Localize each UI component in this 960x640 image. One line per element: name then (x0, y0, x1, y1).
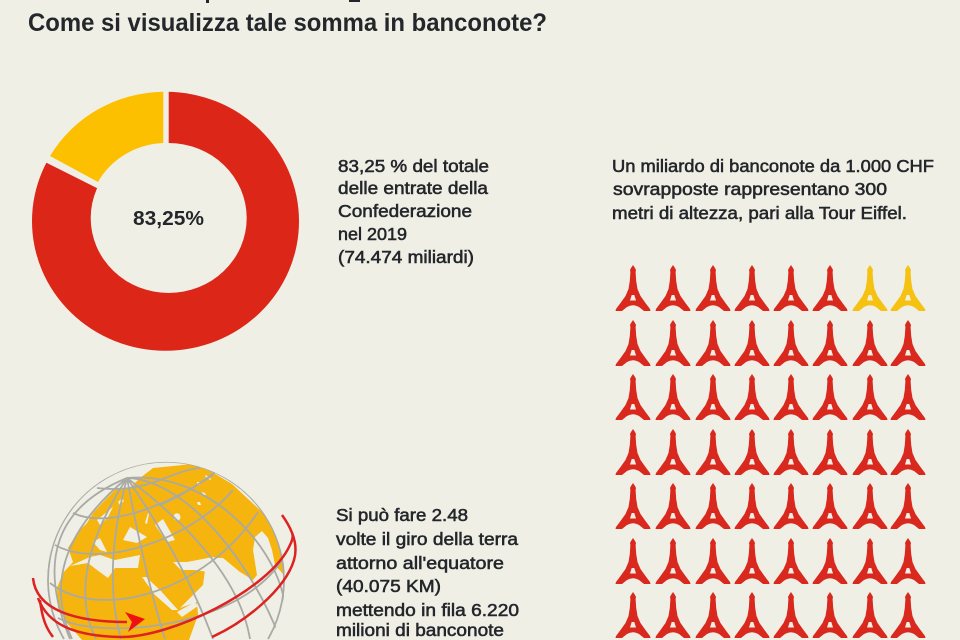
text block: share of revenue: Confederazione (338, 201, 472, 221)
donut chart (25, 85, 299, 351)
text block: trips around the equator: attorno all'equatore (336, 553, 504, 573)
text block: trips around the equator: volte il giro della terra (336, 529, 518, 549)
text block: Eiffel Tower comparison (612, 156, 934, 223)
equator arrow lines (33, 515, 296, 637)
text block: share of revenue: 83,25 % del totale (338, 156, 489, 176)
pictogram: grid of Eiffel towers (616, 265, 926, 638)
text block: trips around the equator: milioni di banconote (336, 620, 504, 640)
globe with equator arrows (33, 462, 296, 640)
text block: Eiffel Tower comparison: Un miliardo di banconote da 1.000 CHF (612, 156, 934, 176)
donut segment: yellow share (50, 92, 163, 182)
text block: trips around the equator (336, 505, 519, 640)
text block: share of revenue: delle entrate della (338, 178, 488, 198)
text block: share of revenue: (74.474 miliardi) (338, 247, 474, 267)
text block: share of revenue: nel 2019 (338, 224, 407, 244)
text block: Eiffel Tower comparison: sovrapposte rappresentano 300 (613, 179, 887, 199)
heading descender fragments (206, 0, 360, 3)
globe land masses (57, 464, 285, 640)
donut value label: 83,25% (133, 208, 204, 230)
text block: share of revenue (338, 156, 489, 267)
text block: trips around the equator: (40.075 KM) (336, 576, 441, 596)
globe meridians and parallels (48, 462, 285, 639)
text block: Eiffel Tower comparison: metri di altezza, pari alla Tour Eiffel. (612, 203, 907, 223)
text block: trips around the equator: Si può fare 2.48 (336, 505, 468, 525)
equator arrow head (125, 612, 145, 632)
title: Come si visualizza tale somma in banconote? (28, 9, 547, 37)
text block: trips around the equator: mettendo in fila 6.220 (336, 600, 519, 620)
